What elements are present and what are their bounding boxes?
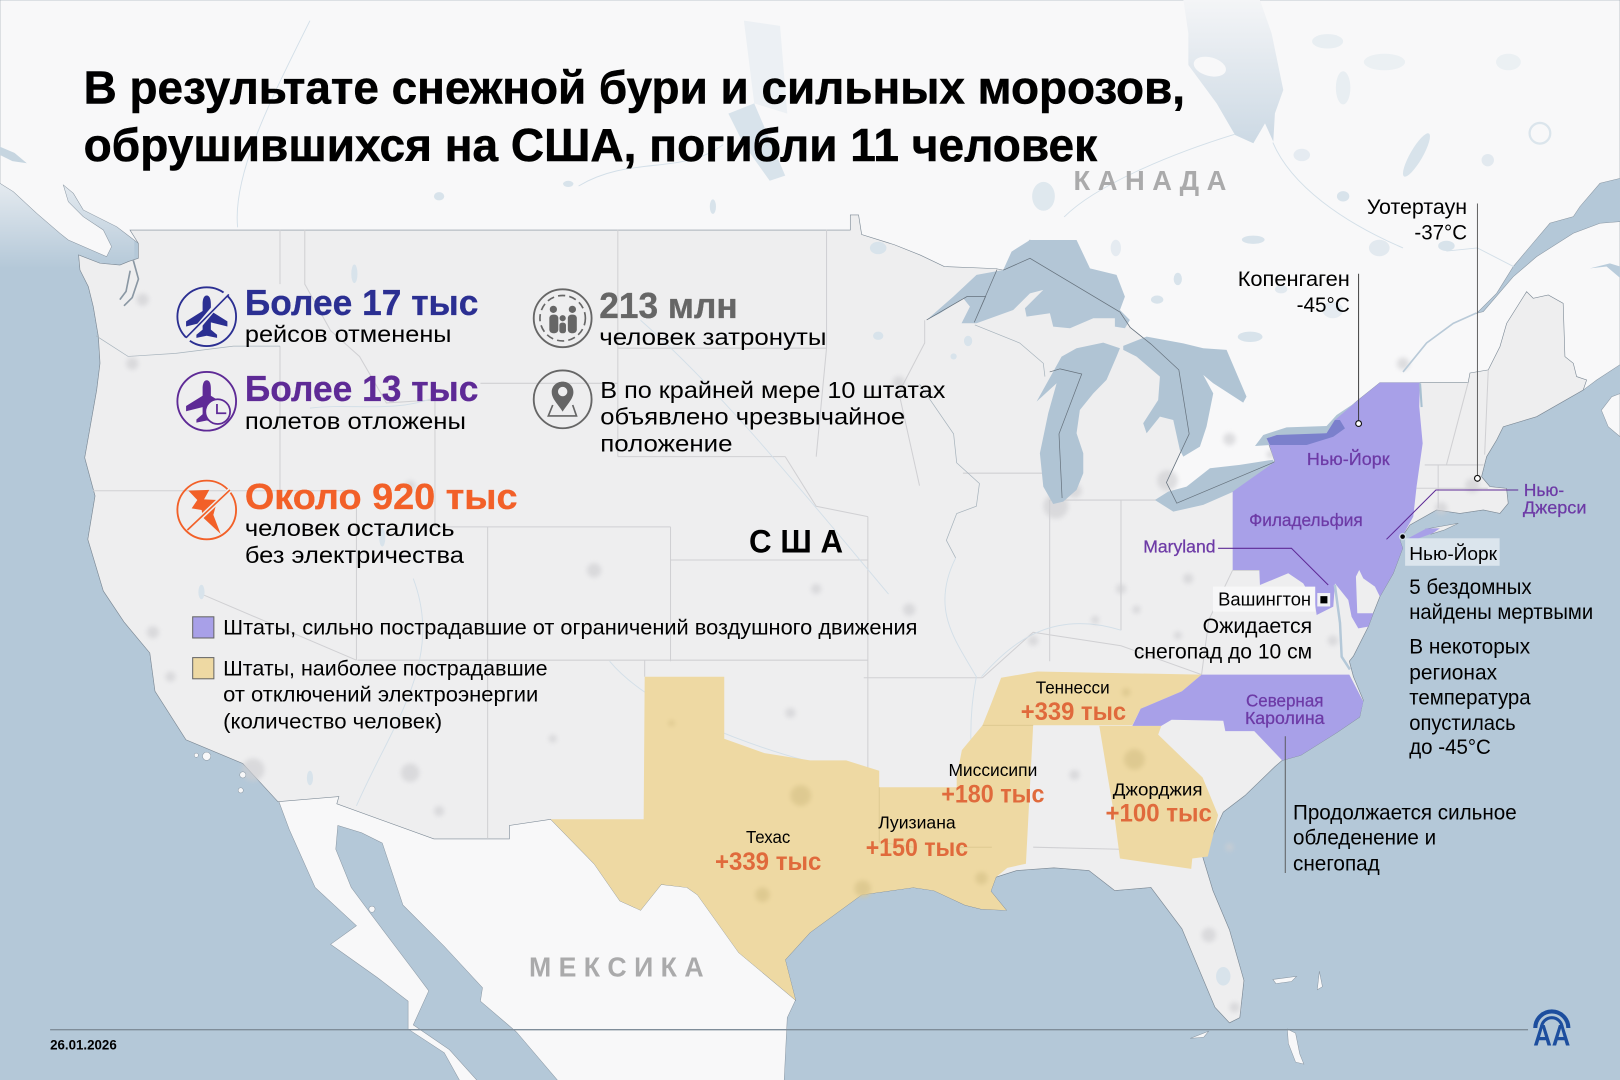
legend text: tan xyxy=(223,655,548,733)
note: homeless: найдены мертвыми xyxy=(1409,601,1593,624)
legend text: tan: (количество человек) xyxy=(223,708,442,733)
state label: New Jersey with leader: Джерси xyxy=(1523,497,1586,517)
note: icing xyxy=(1285,736,1517,876)
outage label: Louisiana xyxy=(866,813,968,862)
text block xyxy=(600,377,946,456)
Lake Huron xyxy=(1123,337,1247,457)
note: temperature: регионах xyxy=(1409,661,1497,684)
note: temperature: до -45°C xyxy=(1409,736,1491,759)
state label: Maryland with leader xyxy=(1143,537,1328,585)
icon: map pin xyxy=(534,370,592,428)
note: homeless xyxy=(1409,576,1593,624)
note: snowfall xyxy=(1134,613,1312,664)
callout: Watertown: Уотертаун xyxy=(1367,196,1467,219)
caption: человек затронуты xyxy=(599,324,827,350)
legend xyxy=(193,614,917,733)
callout: Watertown xyxy=(1367,196,1480,481)
outage label: Georgia xyxy=(1105,780,1212,827)
purple state: North Carolina xyxy=(1132,675,1363,760)
note: temperature xyxy=(1409,636,1531,759)
caption: без электричества xyxy=(245,542,464,568)
Nova Scotia xyxy=(1601,394,1620,437)
country label: Mexico: М Е К С И К А xyxy=(529,951,704,982)
rivers and state river borders xyxy=(96,325,1045,558)
note: icing: снегопад xyxy=(1293,853,1380,876)
caption: рейсов отменены xyxy=(245,321,451,347)
value: 213 млн xyxy=(599,285,738,326)
outage label: Tennessee xyxy=(1021,677,1126,726)
Chesapeake bay xyxy=(1335,585,1350,669)
callout: New York city: Нью-Йорк xyxy=(1409,543,1498,564)
icon: crossed lightning xyxy=(177,481,236,539)
callout: Washington: Вашингтон xyxy=(1218,588,1311,609)
bottom rule xyxy=(50,1029,1528,1031)
note: temperature: опустилась xyxy=(1409,712,1516,735)
stat: cancelled flights xyxy=(177,282,478,347)
outage label: Mississippi xyxy=(941,760,1045,808)
Bay of Chaleur xyxy=(1590,263,1620,278)
title xyxy=(84,61,1185,171)
Canadian lakes xyxy=(198,21,1521,986)
islands xyxy=(194,752,1322,1064)
state label: North Carolina xyxy=(1245,690,1325,728)
icon: plane with clock xyxy=(177,372,236,431)
St Lawrence river xyxy=(1403,313,1476,372)
date: 26.01.2026 xyxy=(50,1038,117,1053)
state label: New York: Нью-Йорк xyxy=(1307,448,1390,469)
country label: USA: С Ш А xyxy=(749,524,843,560)
Lake Champlain xyxy=(1420,383,1422,407)
state label: Philadelphia: Филадельфия xyxy=(1249,510,1363,530)
Lake Michigan xyxy=(1037,343,1120,504)
value: Около 920 тыс xyxy=(245,476,518,517)
legend text: tan: Штаты, наиболее пострадавшие xyxy=(223,655,548,680)
logo: AA: AA xyxy=(1533,1020,1570,1053)
outage label: Mississippi: +180 тыс xyxy=(941,781,1045,808)
state label: North Carolina: Каролина xyxy=(1245,708,1325,728)
stat: state of emergency xyxy=(534,370,946,456)
caption xyxy=(245,515,464,568)
tan states: Texas, Louisiana, Mississippi, Tennessee xyxy=(551,672,1202,1000)
callout: New York city xyxy=(1399,533,1500,566)
island in James Bay xyxy=(1191,53,1228,80)
outage label: Texas: +339 тыс xyxy=(715,849,822,876)
Long Island xyxy=(1426,523,1458,534)
outage label: Louisiana: +150 тыс xyxy=(866,835,968,862)
callout: Watertown: -37°C xyxy=(1414,222,1467,245)
stat: delayed flights xyxy=(177,368,478,434)
Long Island purple part xyxy=(1405,528,1440,541)
text block: объявлено чрезвычайное xyxy=(600,404,905,430)
Hudson and James Bay xyxy=(1183,0,1283,143)
note: snowfall: снегопад до 10 см xyxy=(1134,639,1312,664)
value: Более 13 тыс xyxy=(245,368,478,409)
Lake Erie xyxy=(1155,460,1275,512)
ocean fade at top left xyxy=(0,155,134,269)
legend swatch: purple xyxy=(193,617,214,638)
icon: cancelled plane xyxy=(177,287,236,346)
legend swatch: tan xyxy=(193,658,214,679)
state label: Maryland with leader: Maryland xyxy=(1143,537,1216,557)
note: temperature: температура xyxy=(1409,687,1531,710)
text block: В по крайней мере 10 штатах xyxy=(600,377,946,403)
stat: power outages xyxy=(177,476,518,568)
city lights xyxy=(126,293,1479,1013)
outage label: Texas xyxy=(715,827,822,876)
outage label: Georgia: +100 тыс xyxy=(1105,800,1212,827)
outage label: Texas: Техас xyxy=(746,827,791,847)
note: snowfall: Ожидается xyxy=(1203,613,1312,638)
caption: полетов отложены xyxy=(245,408,466,434)
Puget Sound xyxy=(120,260,138,306)
state label: New Jersey with leader xyxy=(1387,480,1586,539)
outage label: Tennessee: Теннесси xyxy=(1036,677,1110,697)
tan state: Georgia xyxy=(1099,726,1218,869)
state label: North Carolina: Северная xyxy=(1246,690,1323,710)
tan state lines and city lights xyxy=(668,688,1145,902)
callout: Copenhagen xyxy=(1238,268,1362,426)
note: icing: Продолжается сильное xyxy=(1293,801,1517,824)
outage label: Louisiana: Луизиана xyxy=(878,813,956,833)
note: temperature: В некоторых xyxy=(1409,636,1531,659)
title: В результате снежной бури и сильных морозов, xyxy=(84,61,1185,113)
icon: people in ring xyxy=(534,289,592,347)
state label: New Jersey with leader: Нью- xyxy=(1524,480,1564,500)
note: icing: обледенение и xyxy=(1293,827,1436,850)
note: homeless: 5 бездомных xyxy=(1409,576,1532,599)
value: Более 17 тыс xyxy=(245,282,478,323)
title: обрушившихся на США, погибли 11 человек xyxy=(84,119,1098,171)
Lake Ontario overlap xyxy=(1267,420,1345,445)
caption: человек остались xyxy=(245,515,455,541)
outage label: Mississippi: Миссисипи xyxy=(948,760,1037,780)
callout: Copenhagen: Копенгаген xyxy=(1238,268,1350,291)
callout: Copenhagen: -45°C xyxy=(1297,294,1350,317)
outage label: Georgia: Джорджия xyxy=(1113,780,1203,800)
country label: Canada: К А Н А Д А xyxy=(1073,165,1226,196)
text block: положение xyxy=(600,430,733,456)
Lake Superior xyxy=(927,240,1130,328)
stat: people affected xyxy=(534,285,827,350)
Lake Ontario xyxy=(1255,402,1357,446)
United States xyxy=(79,215,1587,1023)
outage label: Tennessee: +339 тыс xyxy=(1021,699,1126,726)
Canada border in lakes xyxy=(927,258,1275,503)
legend text: tan: от отключений электроэнергии xyxy=(223,682,538,707)
state lines xyxy=(93,229,1488,849)
crater lake ring xyxy=(1530,123,1550,144)
legend text: purple: Штаты, сильно пострадавшие от ограничений воздушного движения xyxy=(223,614,917,639)
purple states: NY, PA, NJ, MD xyxy=(1233,383,1423,628)
BC inlet xyxy=(0,147,27,163)
callout: Washington xyxy=(1213,587,1330,612)
